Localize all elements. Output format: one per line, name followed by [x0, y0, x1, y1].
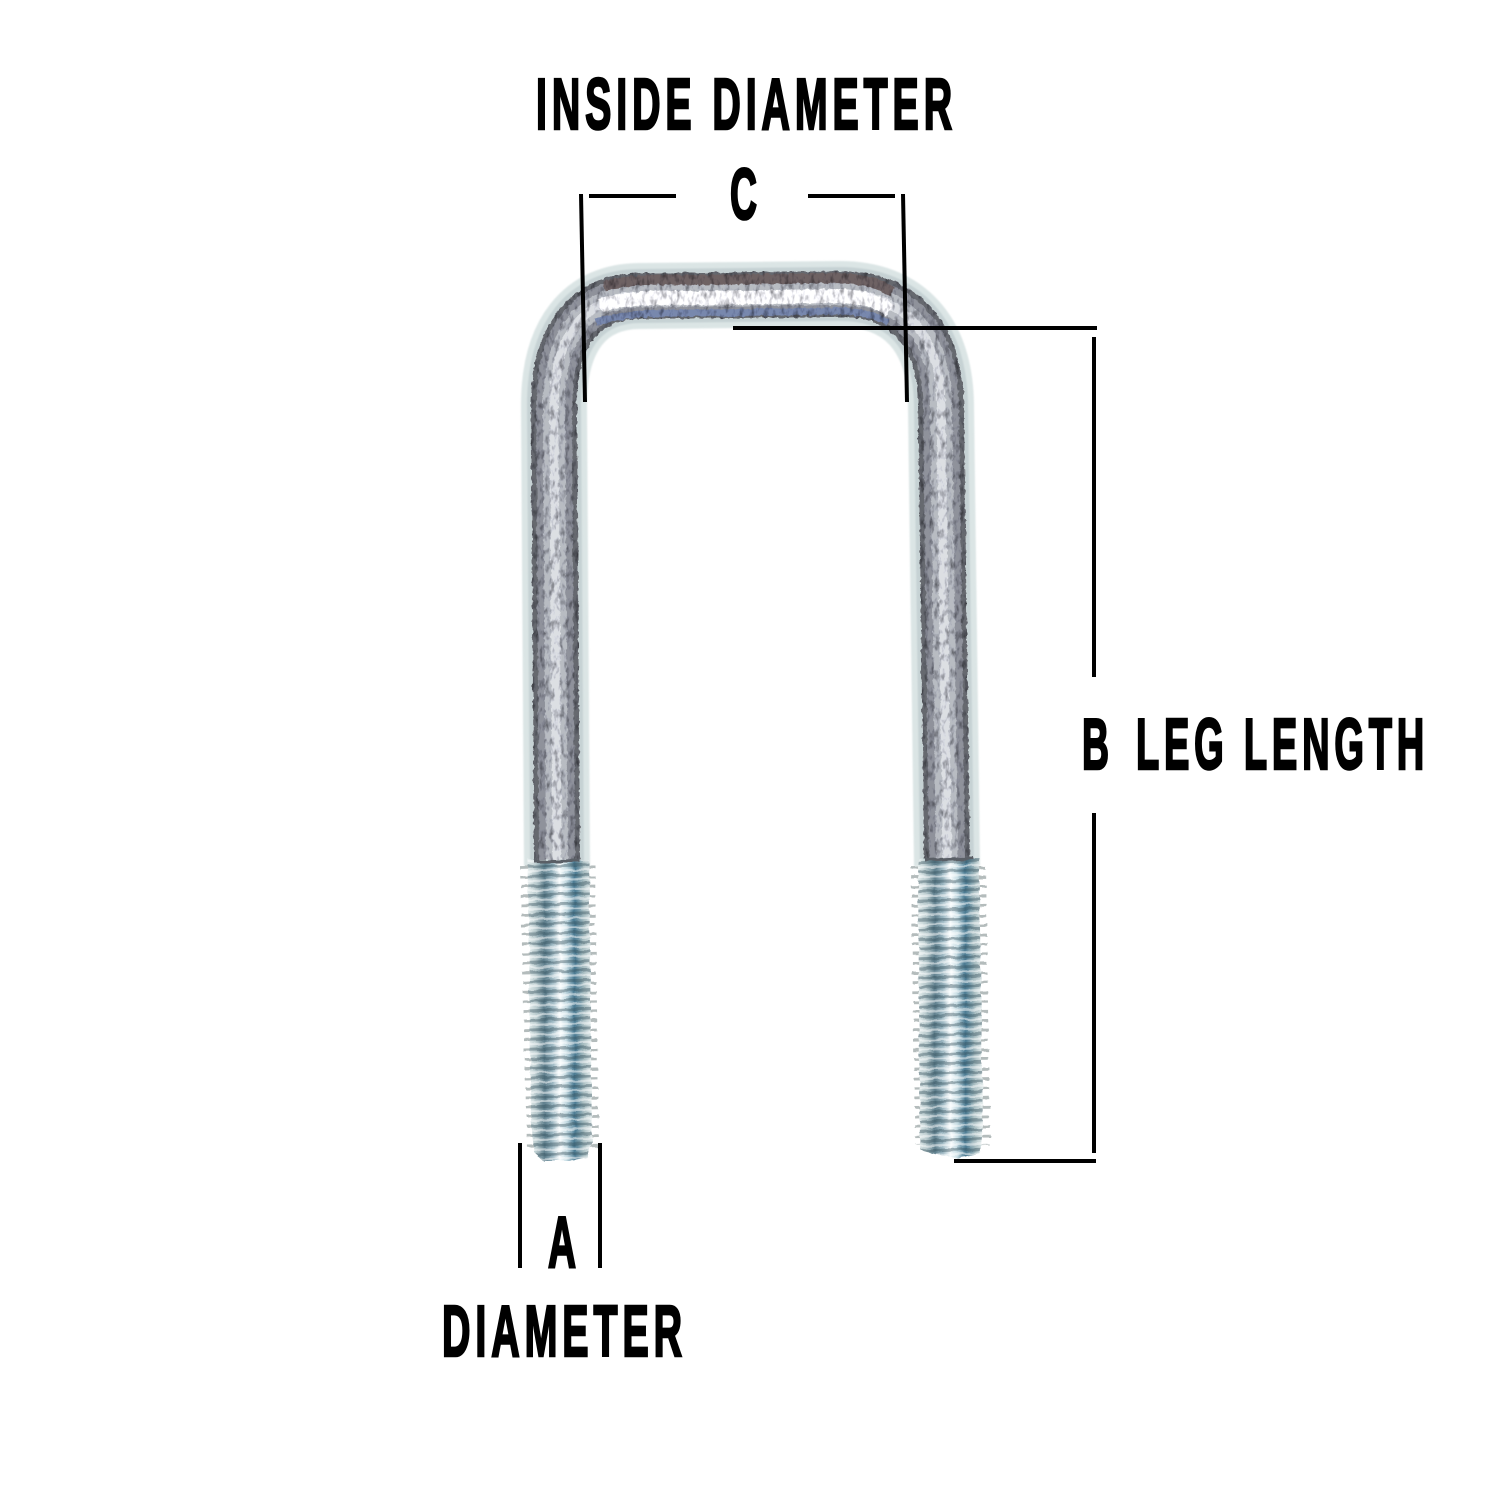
- left thread teeth: [525, 866, 532, 1150]
- left thread shaft: [528, 860, 592, 1161]
- heading: inside diameter: INSIDE DIAMETER: [536, 65, 957, 145]
- bolt body: smooth bent rod: [554, 278, 947, 866]
- left threaded end: [525, 860, 594, 1161]
- right thread teeth: [916, 866, 920, 1145]
- label: diameter: DIAMETER: [442, 1292, 687, 1372]
- dimension C: [581, 194, 907, 402]
- bar highlights: [600, 296, 890, 310]
- right thread shaft: [918, 859, 983, 1158]
- u-bolt photo illustration: [525, 278, 985, 1161]
- dimension A: [520, 1143, 600, 1268]
- label C: C: [730, 155, 757, 235]
- label B: B: [1082, 705, 1109, 785]
- right threaded end: [916, 858, 985, 1158]
- dimension B: [733, 328, 1097, 1161]
- label A: A: [548, 1203, 576, 1283]
